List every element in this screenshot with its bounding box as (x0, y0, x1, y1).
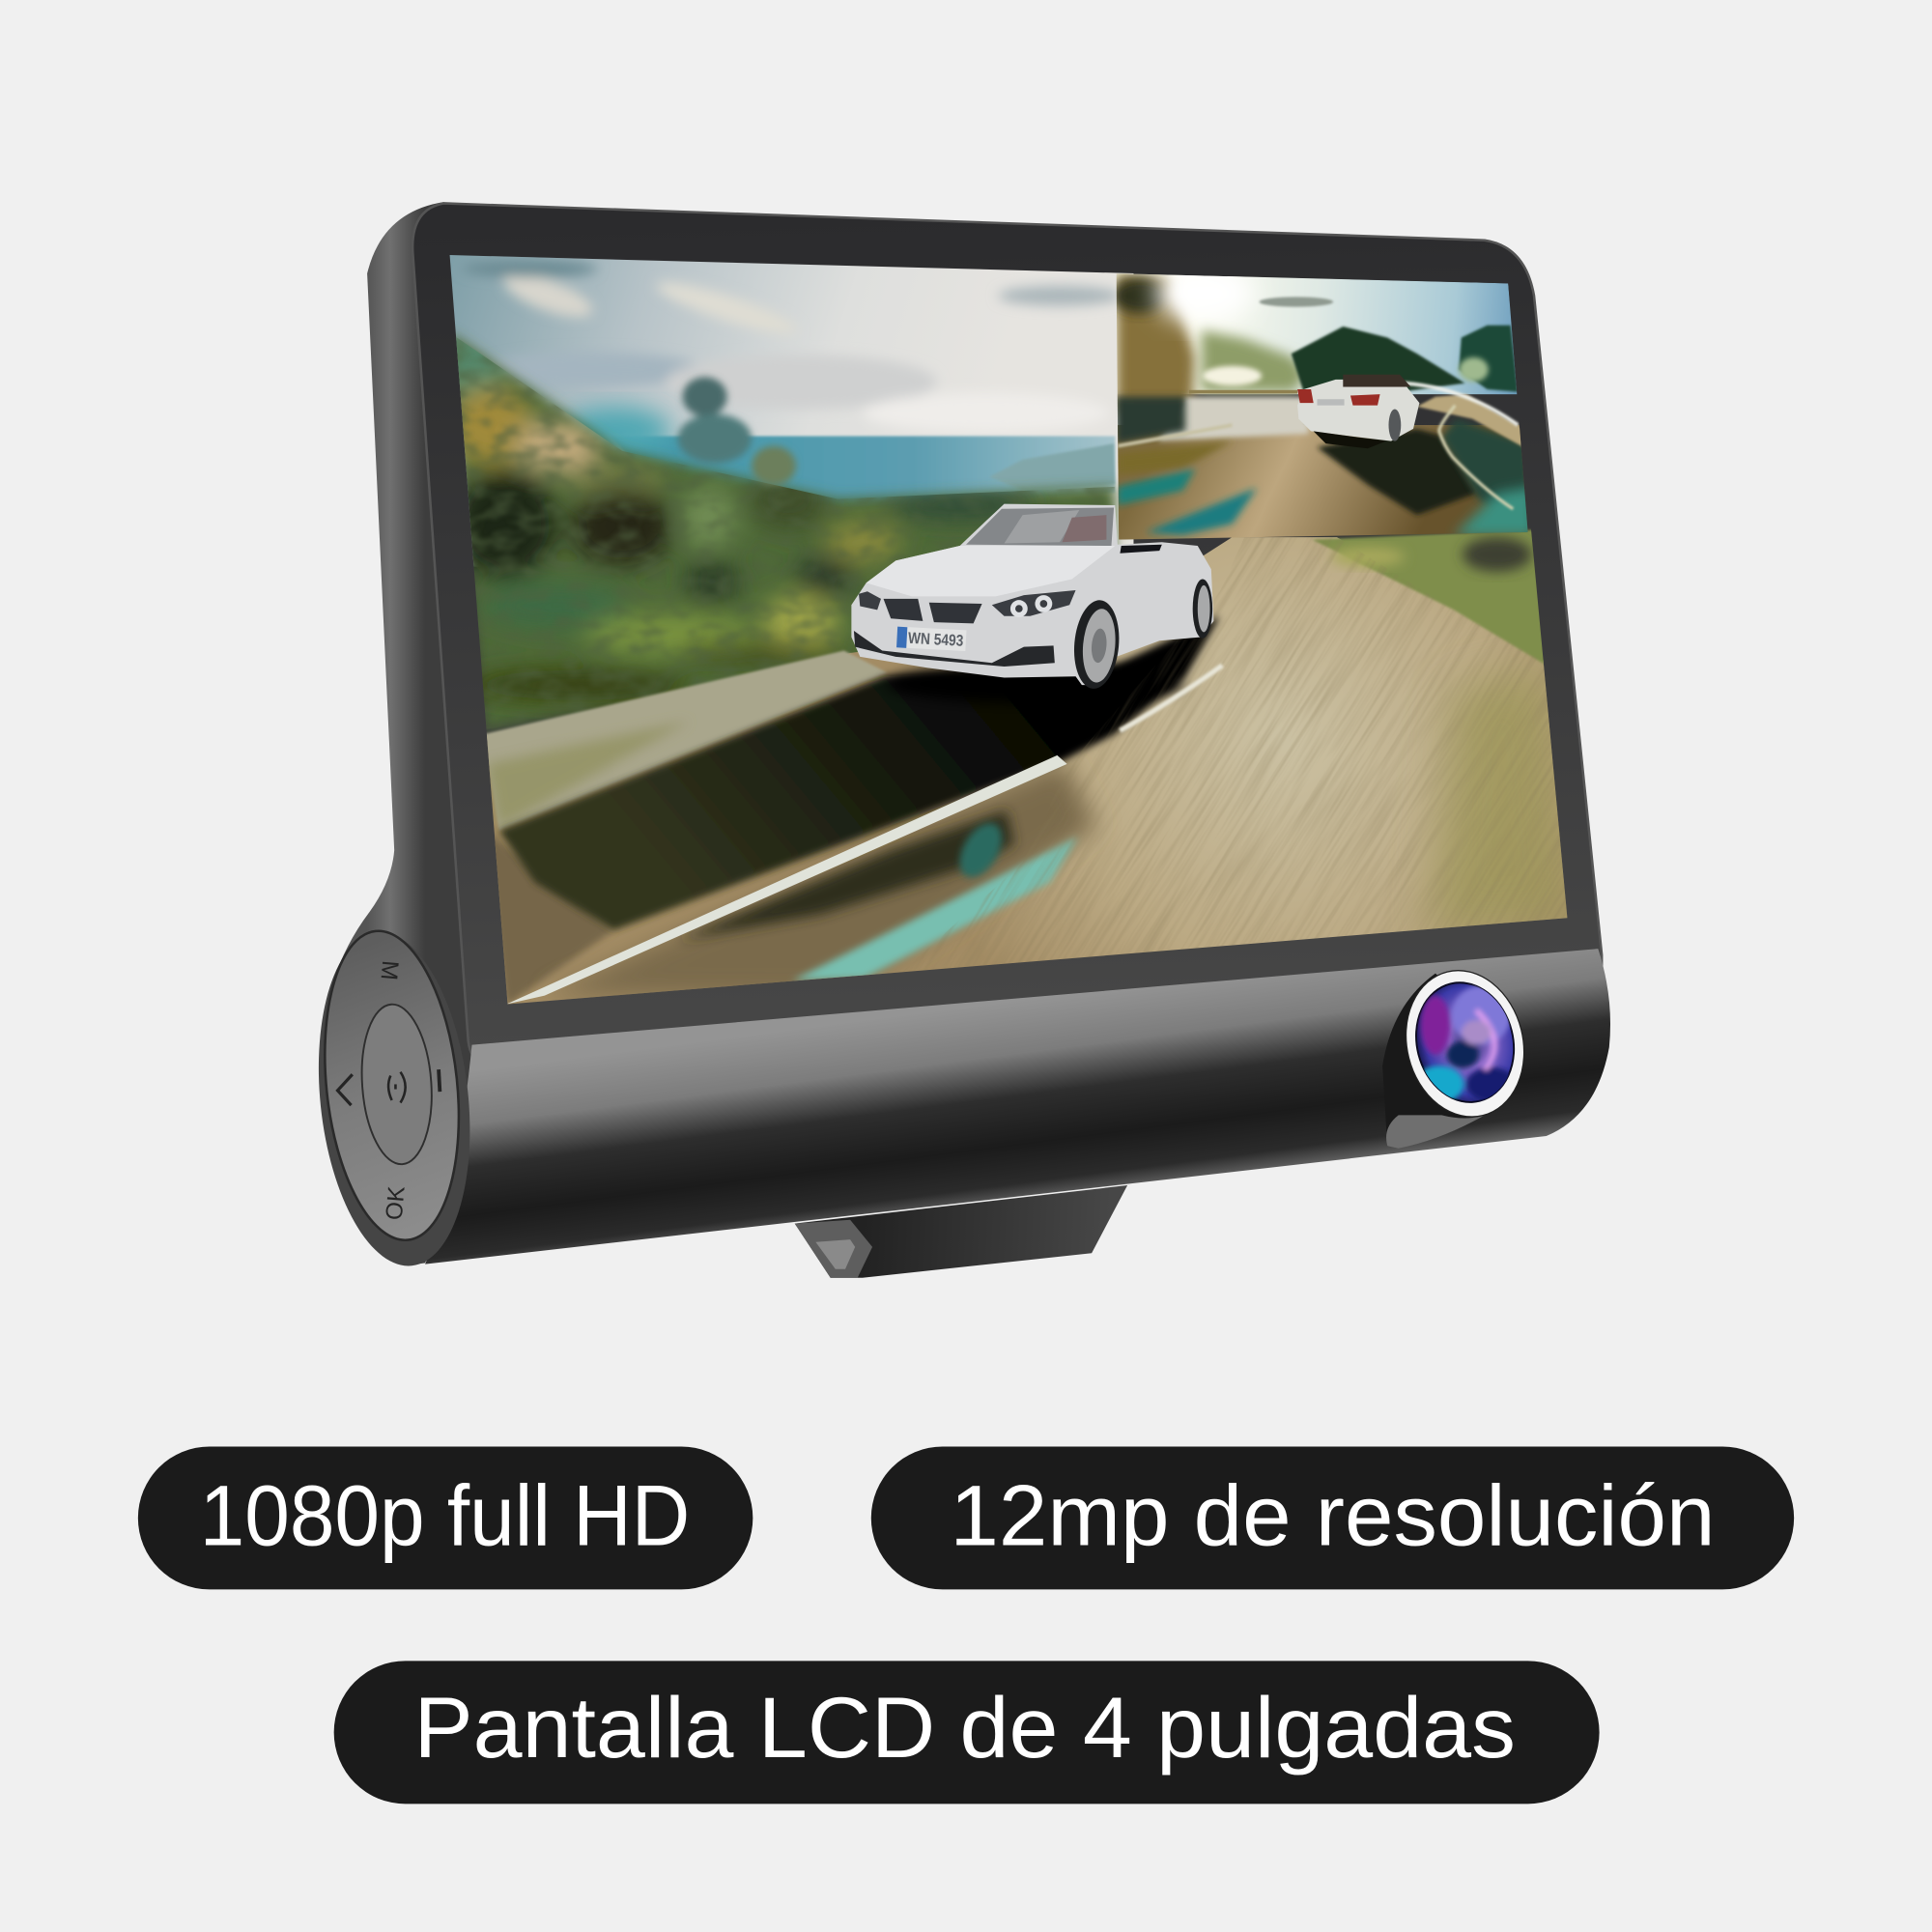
car grille (884, 599, 982, 623)
inset left trees (1117, 273, 1195, 412)
small car (1297, 375, 1419, 448)
sky (443, 246, 1133, 567)
pill: 12mp de resolución (871, 1446, 1794, 1589)
mount bracket (795, 1185, 1127, 1278)
inset road (1109, 425, 1534, 542)
inset road bands (1118, 441, 1257, 535)
lens housing (1382, 974, 1521, 1146)
power button ring (356, 1002, 437, 1167)
road right verge (1312, 529, 1547, 666)
car plate (896, 627, 966, 651)
icon: left arrow (337, 1074, 353, 1105)
inset sky (1109, 271, 1534, 394)
car hood (867, 546, 1115, 596)
left blue haze (560, 407, 671, 456)
distant headland (989, 443, 1115, 491)
dashcam product illustration (319, 202, 1610, 1278)
hillside (443, 332, 1115, 739)
car windshield (966, 508, 1114, 546)
button label: ok: OK (382, 1185, 411, 1221)
road streak texture (723, 292, 1742, 1310)
tree (678, 377, 796, 486)
icon: power (388, 1072, 406, 1103)
infographic canvas (137, 202, 1795, 1804)
shadow below line (678, 810, 1014, 940)
pill: 1080p full HD (138, 1446, 753, 1589)
inset road curb (1439, 406, 1513, 509)
inset guard rail (1189, 390, 1297, 393)
icon: minus (439, 1069, 440, 1092)
road shadow (499, 616, 1220, 930)
camera lens (1382, 958, 1539, 1149)
left road band (483, 650, 887, 831)
main car: WN 5493 (908, 629, 964, 650)
teal road reflection (792, 837, 1078, 980)
pill: 12mp de resolución: 12mp de resolución (950, 1466, 1716, 1563)
disc face (311, 924, 473, 1247)
screen image (450, 255, 1567, 1005)
inset road shadow (1318, 429, 1477, 515)
inset sun (1155, 264, 1254, 323)
inset rear view (1109, 264, 1534, 542)
curved road line (1120, 666, 1222, 730)
road surface (474, 537, 1583, 1023)
pill: Pantalla LCD de 4 pulgadas (334, 1661, 1600, 1804)
main car (851, 504, 1213, 691)
car lower intake (854, 631, 1055, 667)
car body (851, 504, 1213, 685)
car headlights (992, 590, 1076, 616)
button label: mode: M (376, 959, 403, 981)
lower left road (483, 828, 613, 1006)
disc rim (303, 924, 485, 1273)
device front bezel (412, 203, 1602, 1060)
left end control disc (303, 924, 485, 1273)
inset cloud (1260, 297, 1333, 307)
white road line (506, 755, 1067, 1005)
lens ring (1391, 958, 1539, 1129)
pill: Pantalla LCD de 4 pulgadas: Pantalla LCD de 4 pulgadas (414, 1679, 1516, 1776)
sea (610, 437, 1115, 510)
lower camera bar (425, 949, 1610, 1264)
pill: 1080p full HD: 1080p full HD (200, 1466, 690, 1563)
lens glass (1404, 972, 1526, 1113)
car wheels (1070, 598, 1122, 691)
car mirror (1120, 545, 1162, 554)
right road olive tint (1430, 666, 1575, 936)
inset mountain (1292, 327, 1465, 392)
clouds (462, 260, 1122, 433)
inset distant hill (1202, 330, 1306, 392)
device back shell (321, 202, 493, 1264)
